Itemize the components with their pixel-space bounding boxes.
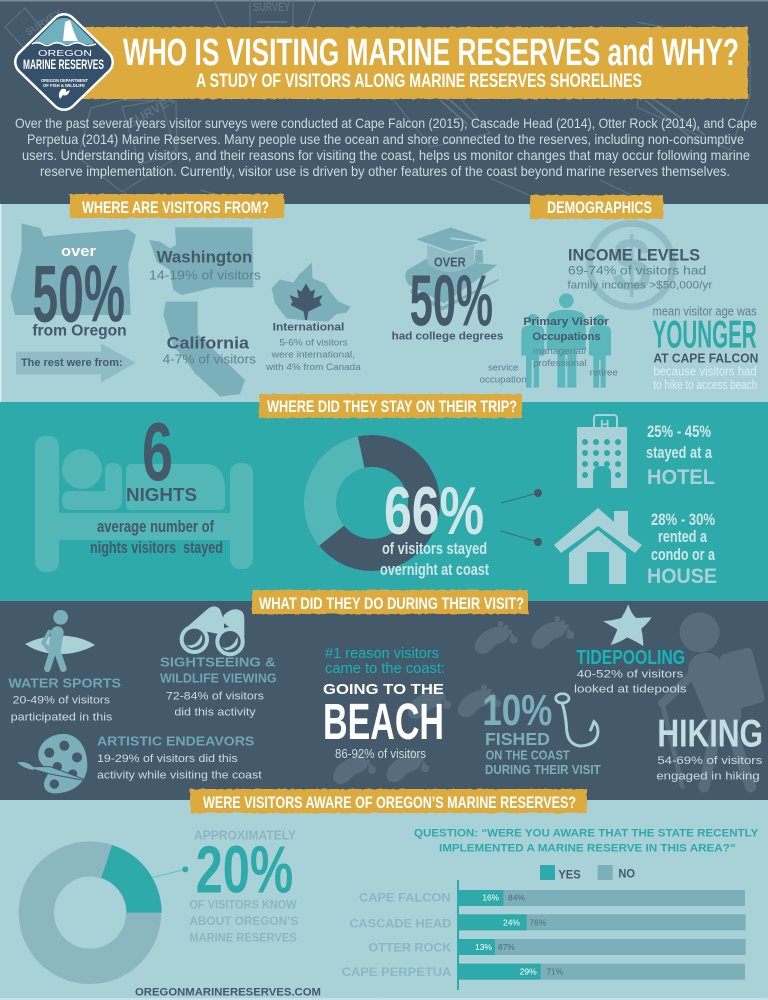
hiking: 54-69% of visitors bbox=[657, 755, 763, 767]
legend bbox=[540, 865, 635, 881]
stat: 6 nights: average number of bbox=[97, 517, 214, 536]
logo: Oregon Marine Reserves: OREGON bbox=[38, 49, 92, 58]
artistic endeavors: 19-29% of visitors did this bbox=[97, 753, 238, 765]
icon: dollar coin bbox=[590, 223, 673, 309]
sightseeing and wildlife viewing: SIGHTSEEING & bbox=[160, 655, 276, 669]
heading: where are visitors from: WHERE ARE VISITORS FROM? bbox=[82, 198, 269, 217]
intro text bbox=[15, 115, 757, 179]
panel: where did they stay bbox=[0, 402, 768, 601]
primary visitor occupations: Occupations bbox=[532, 331, 601, 343]
logo: Oregon Marine Reserves: OREGON DEPARTMENT bbox=[41, 78, 88, 83]
International stat: were international, bbox=[271, 350, 355, 360]
donut chart: 66 percent stayed overnight bbox=[320, 451, 424, 555]
primary visitor occupations: managerial/ bbox=[533, 346, 587, 356]
hotel stat: HOTEL bbox=[647, 466, 715, 489]
younger at Cape Falcon bbox=[653, 305, 758, 392]
over label: over bbox=[61, 244, 96, 260]
survey question: QUESTION: “WERE YOU AWARE THAT THE STATE RECENTLY bbox=[414, 828, 759, 840]
heading: were visitors aware bbox=[190, 789, 587, 813]
row: Otter Rock: 13% bbox=[475, 943, 492, 952]
younger at Cape Falcon: mean visitor age was bbox=[653, 305, 757, 319]
panel: what did they do, left half bbox=[0, 601, 384, 800]
house stat: 28% - 30% bbox=[651, 510, 715, 529]
hotel stat: stayed at a bbox=[646, 443, 712, 462]
icon: binoculars bbox=[182, 606, 244, 654]
bar chart: awareness by reserve bbox=[342, 880, 746, 990]
income levels: family incomes >$50,000/yr bbox=[567, 280, 713, 292]
Washington stat bbox=[149, 247, 261, 282]
panel: demographics bbox=[384, 204, 768, 402]
stat: over 50 percent college degrees bbox=[392, 255, 503, 342]
tidepooling: looked at tidepools bbox=[574, 684, 687, 696]
stat: approximately 20 percent: APPROXIMATELY bbox=[194, 828, 297, 842]
younger at Cape Falcon: AT CAPE FALCON bbox=[653, 351, 758, 366]
heading: what did they do: WHAT DID THEY DO DURING THEIR VISIT? bbox=[259, 594, 524, 613]
stat: 6 nights: nights visitors stayed bbox=[90, 538, 223, 557]
income levels: 69-74% of visitors had bbox=[568, 264, 706, 278]
legend: YES bbox=[558, 867, 581, 881]
icon: hotel bbox=[577, 415, 627, 488]
primary visitor occupations: Primary Visitor bbox=[523, 316, 610, 328]
connector: to hotel bbox=[501, 489, 542, 503]
background survey sheets: SURVEY bbox=[125, 91, 179, 131]
stat: 66 percent: 66% bbox=[384, 473, 484, 549]
California stat: 4-7% of visitors bbox=[163, 352, 256, 366]
hotel stat: 25% - 45% bbox=[647, 422, 711, 441]
icon: graduation cap on books bbox=[405, 227, 499, 311]
water sports: 20-49% of visitors bbox=[13, 695, 110, 707]
row: Cascade Head: CASCADE HEAD bbox=[349, 917, 452, 931]
younger at Cape Falcon: because visitors had bbox=[653, 364, 757, 378]
heading: demographics: DEMOGRAPHICS bbox=[547, 198, 652, 217]
number one reason: going to the beach: BEACH bbox=[323, 693, 444, 750]
icon: paint palette and brush bbox=[17, 734, 91, 793]
primary visitor occupations: occupation bbox=[480, 375, 527, 385]
logo: Oregon Marine Reserves bbox=[23, 18, 104, 99]
hotel stat bbox=[646, 422, 715, 489]
website: OREGONMARINERESERVES.COM bbox=[135, 987, 321, 999]
primary visitor occupations: service bbox=[488, 363, 518, 373]
icon: surfer bbox=[25, 610, 95, 669]
background survey sheets bbox=[5, 0, 750, 204]
stat: 66 percent: of visitors stayed bbox=[382, 539, 487, 558]
map: Canada with maple leaf bbox=[272, 263, 351, 322]
stat: over 50 percent college degrees: 50% bbox=[410, 261, 493, 342]
sightseeing and wildlife viewing bbox=[160, 655, 277, 719]
number one reason: going to the beach: #1 reason visitors bbox=[325, 645, 439, 662]
background survey sheets: SURVEY bbox=[253, 0, 290, 14]
heading: where did they stay: WHERE DID THEY STAY ON THEIR TRIP? bbox=[267, 397, 517, 416]
stat: 66 percent bbox=[380, 473, 489, 579]
map: Washington bbox=[149, 227, 253, 295]
connector: donut to stat bbox=[153, 866, 188, 877]
stat: approximately 20 percent: 20% bbox=[196, 834, 293, 908]
house stat: condo or a bbox=[651, 545, 715, 564]
stat: 6 nights bbox=[90, 405, 223, 557]
survey question bbox=[414, 828, 759, 855]
row: Cape Perpetua: 71% bbox=[546, 967, 563, 976]
panel: what did they do, right half bbox=[333, 601, 768, 800]
Washington stat: 14-19% of visitors bbox=[149, 268, 261, 282]
heading: where did they stay bbox=[259, 394, 522, 418]
stat: approximately 20 percent: MARINE RESERVES bbox=[189, 931, 297, 945]
water sports: WATER SPORTS bbox=[8, 676, 121, 690]
stat: 10 percent fished: FISHED bbox=[485, 729, 550, 749]
row: Cape Falcon: 16% bbox=[482, 894, 499, 903]
number one reason: going to the beach: 86-92% of visitors bbox=[335, 747, 426, 761]
water sports bbox=[8, 676, 121, 723]
sightseeing and wildlife viewing: WILDLIFE VIEWING bbox=[160, 672, 277, 686]
panel: were visitors aware, right half bbox=[342, 800, 768, 1000]
arrow: the rest were from: The rest were from: bbox=[21, 357, 123, 369]
stat: approximately 20 percent bbox=[189, 828, 298, 945]
stat: approximately 20 percent: OF VISITORS KNOW bbox=[189, 897, 297, 911]
background survey sheets: SURVEY bbox=[24, 7, 65, 39]
International stat bbox=[265, 322, 362, 372]
hiking bbox=[656, 712, 763, 783]
icon: footprints bbox=[333, 616, 574, 784]
California stat: California bbox=[167, 334, 250, 353]
row: Cape Falcon bbox=[359, 890, 745, 906]
row: Cape Falcon: 84% bbox=[508, 894, 525, 903]
row: Otter Rock bbox=[368, 939, 746, 955]
tidepooling: TIDEPOOLING bbox=[576, 647, 685, 669]
income levels bbox=[567, 246, 713, 292]
row: Cape Falcon: CAPE FALCON bbox=[359, 891, 451, 905]
row: Cascade Head bbox=[349, 914, 746, 931]
row: Cape Perpetua: 29% bbox=[520, 967, 537, 976]
icon: three business people bbox=[521, 293, 611, 388]
survey question: IMPLEMENTED A MARINE RESERVE IN THIS AREA?” bbox=[439, 843, 736, 855]
icon: dollar coin: $ bbox=[612, 224, 651, 309]
hiking: engaged in hiking bbox=[656, 771, 760, 783]
donut chart: 20 percent aware bbox=[36, 845, 162, 966]
title banner bbox=[81, 27, 748, 99]
stat: 10 percent fished: ON THE COAST bbox=[486, 748, 570, 762]
sightseeing and wildlife viewing: 72-84% of visitors bbox=[166, 690, 264, 702]
sightseeing and wildlife viewing: did this activity bbox=[174, 707, 256, 719]
primary visitor occupations bbox=[480, 316, 618, 385]
logo: Oregon Marine Reserves: OF FISH & WILDLIFE bbox=[43, 83, 85, 88]
row: Otter Rock: OTTER ROCK bbox=[368, 940, 452, 954]
tidepooling bbox=[574, 647, 687, 696]
logo: Oregon Marine Reserves: MARINE RESERVES bbox=[23, 56, 104, 72]
primary visitor occupations: retiree bbox=[590, 367, 618, 377]
stat: approximately 20 percent: ABOUT OREGON’S bbox=[189, 914, 298, 928]
icon: starfish bbox=[603, 604, 652, 646]
icon: house bbox=[554, 508, 642, 584]
heading: where are visitors from bbox=[70, 194, 284, 218]
stat: over 50 percent college degrees: OVER bbox=[434, 255, 466, 269]
number one reason: going to the beach: came to the coast: bbox=[325, 660, 445, 677]
Washington stat: Washington bbox=[157, 247, 252, 266]
water sports: participated in this bbox=[11, 711, 113, 723]
International stat: International bbox=[273, 322, 344, 334]
map: Oregon bbox=[11, 223, 136, 315]
heading: demographics bbox=[530, 195, 663, 219]
stat: 6 nights: 6 bbox=[142, 405, 173, 498]
International stat: 5-6% of visitors bbox=[279, 337, 348, 347]
number one reason: going to the beach: GOING TO THE bbox=[323, 681, 444, 698]
artistic endeavors: ARTISTIC ENDEAVORS bbox=[97, 734, 254, 748]
stat: 50 percent from Oregon: 50% bbox=[32, 250, 125, 340]
stat: 6 nights: NIGHTS bbox=[126, 485, 197, 505]
connector: to house bbox=[501, 531, 542, 546]
section background: header bbox=[0, 0, 768, 204]
primary visitor occupations: professional bbox=[533, 358, 587, 368]
International stat: with 4% from Canada bbox=[265, 362, 362, 372]
house stat bbox=[647, 510, 717, 588]
stat: over 50 percent college degrees: had college degrees bbox=[392, 330, 503, 342]
row: Cascade Head: 24% bbox=[503, 918, 520, 927]
income levels: INCOME LEVELS bbox=[568, 246, 700, 265]
number one reason: going to the beach bbox=[323, 645, 445, 761]
from Oregon label: from Oregon bbox=[32, 323, 127, 340]
panel: were visitors aware, left half bbox=[0, 800, 384, 1000]
stat: 10 percent fished: DURING THEIR VISIT bbox=[485, 763, 601, 777]
row: Cape Perpetua bbox=[342, 964, 745, 980]
heading: what did they do bbox=[252, 590, 528, 614]
tidepooling: 40-52% of visitors bbox=[577, 669, 684, 681]
stat: 66 percent: overnight at coast bbox=[380, 560, 489, 579]
row: Otter Rock: 87% bbox=[498, 943, 515, 952]
arrow: the rest were from bbox=[16, 343, 136, 383]
heading: were visitors aware: WERE VISITORS AWARE OF OREGON’S MARINE RESERVES? bbox=[203, 793, 576, 812]
house stat: HOUSE bbox=[647, 565, 717, 588]
artistic endeavors bbox=[97, 734, 263, 781]
California stat bbox=[163, 334, 256, 366]
icon: bed bbox=[35, 436, 253, 572]
row: Cape Perpetua: CAPE PERPETUA bbox=[342, 965, 452, 979]
house stat: rented a bbox=[658, 527, 707, 546]
stat: 10 percent fished bbox=[482, 686, 601, 777]
icon: hiker silhouette bbox=[662, 612, 766, 787]
legend: NO bbox=[618, 866, 635, 880]
artistic endeavors: activity while visiting the coast bbox=[97, 769, 263, 781]
row: Cascade Head: 76% bbox=[529, 918, 546, 927]
stat: 10 percent fished: 10% bbox=[482, 686, 552, 735]
map: California bbox=[163, 302, 245, 397]
panel: where are visitors from bbox=[0, 204, 384, 402]
icon: fish hook bbox=[556, 694, 598, 746]
icon: hotel: H bbox=[600, 417, 609, 432]
